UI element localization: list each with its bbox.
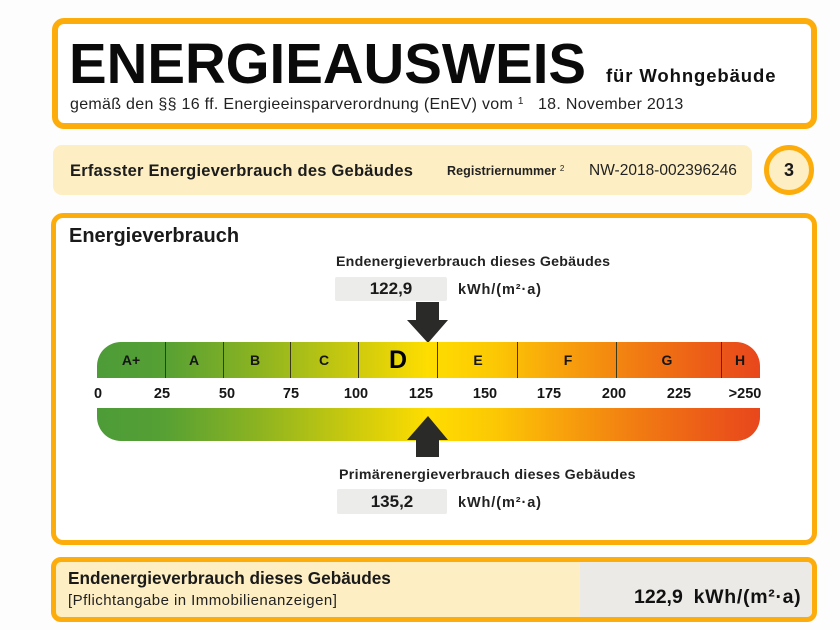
- page number badge: [764, 145, 814, 195]
- scale numbers: >250: [729, 386, 761, 402]
- listing note: [Pflichtangabe in Immobilienanzeigen]: [68, 592, 337, 609]
- scale numbers: 50: [219, 386, 235, 402]
- class labels: C: [319, 352, 329, 368]
- registration number: NW-2018-002396246: [589, 162, 737, 179]
- scale numbers: [94, 386, 761, 402]
- legal reference: gemäß den §§ 16 ff. Energieeinsparverordnung (EnEV) vom 1 18. November 2013: [70, 96, 684, 113]
- subtitle: building type: für Wohngebäude: [606, 65, 776, 86]
- class labels: H: [735, 352, 745, 368]
- class labels: B: [250, 352, 260, 368]
- registration label: Registriernummer 2: [447, 164, 564, 178]
- panel: energy consumption: [51, 213, 817, 545]
- class labels: F: [564, 352, 572, 368]
- panel: mandatory listing figure: [51, 557, 817, 622]
- primary energy value: [337, 489, 447, 514]
- final energy label: Endenergieverbrauch dieses Gebäudes: [336, 254, 610, 270]
- scale bar: energy classes: [97, 342, 760, 378]
- final energy value: [335, 277, 447, 301]
- title: ENERGIEAUSWEIS: [69, 32, 586, 95]
- scale numbers: 175: [537, 386, 561, 402]
- scale bar: primary energy: [97, 408, 760, 441]
- class labels: [122, 346, 745, 374]
- scale numbers: 0: [94, 386, 102, 402]
- panel: header: [52, 18, 817, 129]
- final energy value: 122,9: [370, 279, 412, 298]
- class labels: E: [473, 352, 483, 368]
- final energy unit: kWh/(m²·a): [458, 282, 542, 298]
- scale numbers: 125: [409, 386, 433, 402]
- grey value area: [580, 562, 820, 618]
- listing heading: Endenergieverbrauch dieses Gebäudes: [68, 568, 391, 588]
- scale numbers: 25: [154, 386, 170, 402]
- arrow: final energy: [407, 302, 448, 342]
- panel: registration band: [53, 145, 752, 195]
- class labels: A+: [122, 352, 140, 368]
- scale numbers: 75: [283, 386, 299, 402]
- arrow: primary energy: [407, 416, 448, 457]
- page number badge: 3: [784, 160, 794, 180]
- class labels: D: [389, 346, 407, 374]
- listing value: 122,9 kWh/(m²·a): [634, 586, 801, 608]
- band heading: Erfasster Energieverbrauch des Gebäudes: [70, 162, 413, 180]
- scale numbers: 100: [344, 386, 368, 402]
- primary energy value: 135,2: [371, 492, 413, 511]
- primary energy unit: kWh/(m²·a): [458, 495, 542, 511]
- panel heading: Energieverbrauch: [69, 225, 239, 247]
- primary energy label: Primärenergieverbrauch dieses Gebäudes: [339, 467, 636, 483]
- class labels: A: [189, 352, 199, 368]
- scale numbers: 150: [473, 386, 497, 402]
- class labels: G: [662, 352, 672, 368]
- scale numbers: 200: [602, 386, 626, 402]
- scale numbers: 225: [667, 386, 691, 402]
